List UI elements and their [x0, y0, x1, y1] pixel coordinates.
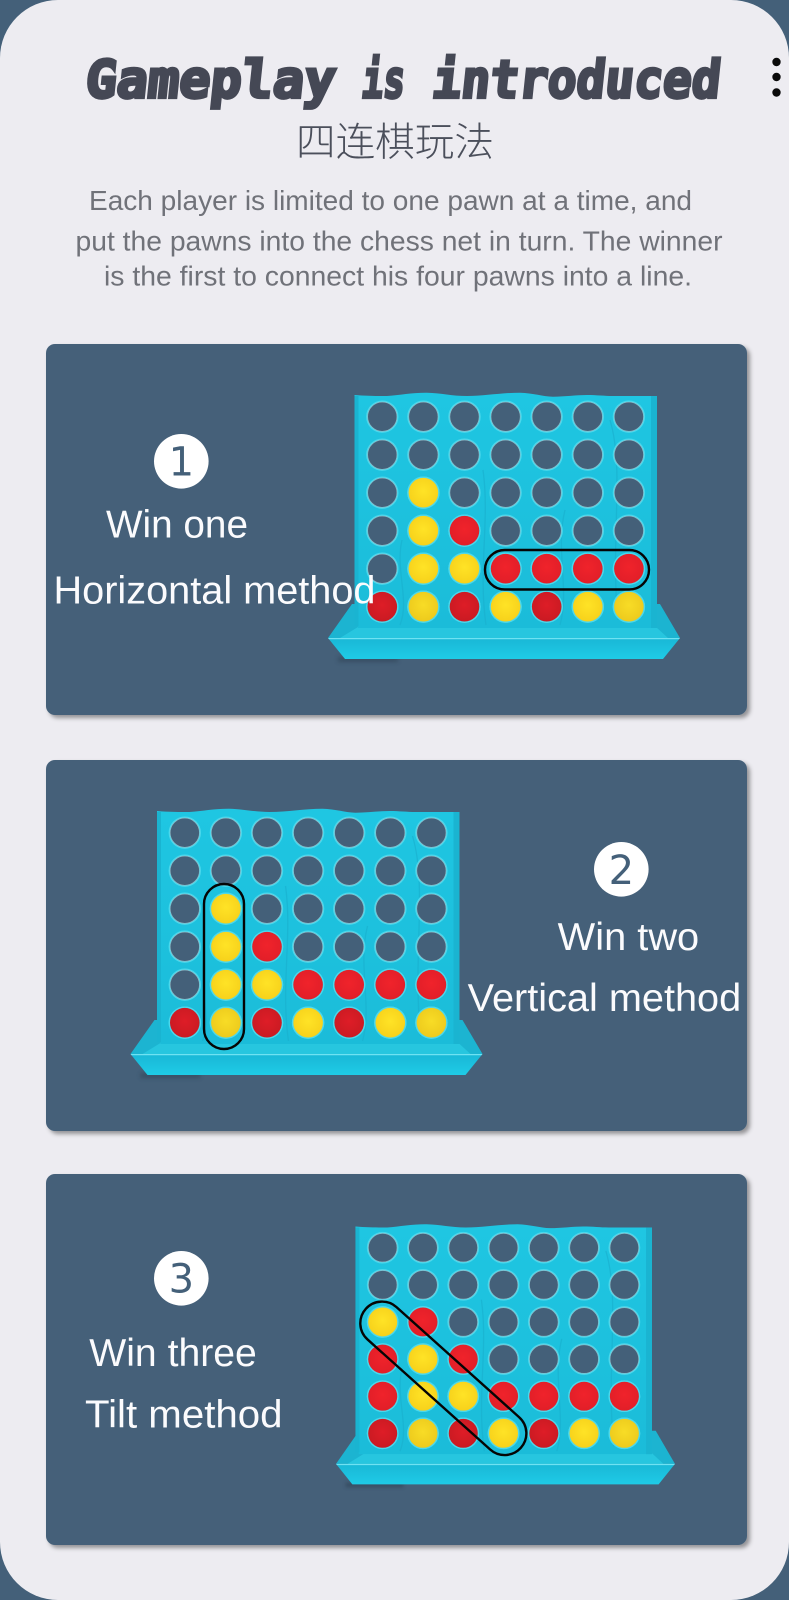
- label: win two: Win two: [558, 916, 699, 959]
- icon: three dots menu: [772, 58, 781, 97]
- label: horizontal method: Horizontal method: [54, 569, 376, 612]
- number badge 2: [594, 842, 649, 897]
- label: tilt method: Tilt method: [85, 1394, 282, 1437]
- label: vertical method: Vertical method: [468, 977, 741, 1020]
- chinese subtitle: 四连棋玩法: [296, 111, 494, 168]
- title: is: [359, 51, 408, 110]
- label: win three: Win three: [89, 1332, 257, 1375]
- intro text: Each player is limited to one pawn at a time, and: [89, 185, 692, 216]
- title: introduced: [430, 51, 724, 110]
- title: [83, 51, 724, 110]
- panel: win three tilt: [46, 1174, 747, 1545]
- board 1 with horizontal line: [328, 393, 680, 662]
- intro text: is the first to connect his four pawns into a line.: [104, 260, 692, 292]
- intro text: [76, 185, 723, 292]
- board 2 with vertical line: [130, 809, 482, 1078]
- intro text: put the pawns into the chess net in turn. The winner: [76, 226, 723, 256]
- number badge 1: [154, 434, 209, 489]
- number badge 3: [154, 1251, 209, 1306]
- number badge 3: 3: [169, 1257, 194, 1303]
- panel: win one horizontal: [46, 344, 747, 715]
- board 3 with diagonal line: [336, 1224, 675, 1487]
- label: win one: Win one: [106, 503, 248, 546]
- title: Gameplay: [83, 51, 339, 110]
- number badge 2: 2: [609, 848, 634, 894]
- number badge 1: 1: [169, 439, 194, 485]
- panel: win two vertical: [46, 760, 747, 1131]
